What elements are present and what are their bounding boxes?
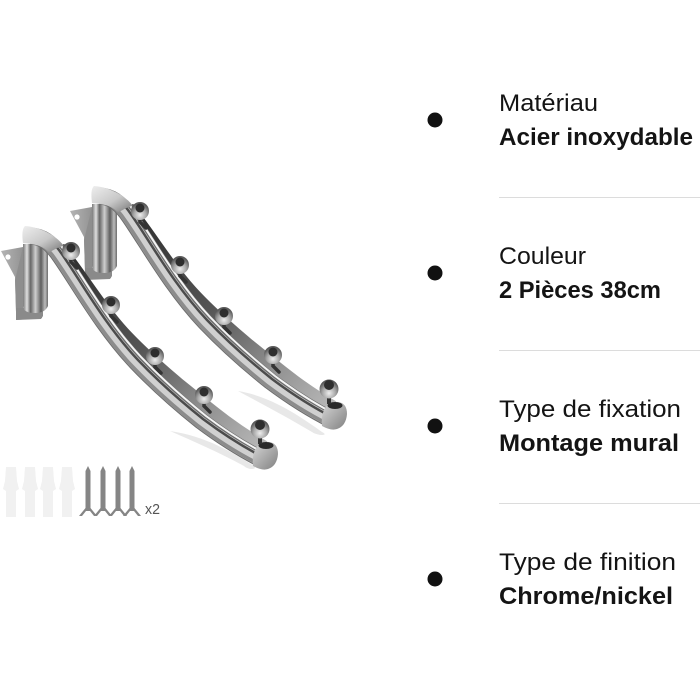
back bracket [70,186,347,430]
icon: wall plugs [3,467,75,517]
quantity label: x2 [145,501,160,518]
value: Chrome/nickel [499,583,673,610]
bullet [428,572,442,586]
icon: screws [79,466,141,516]
product image: wall mounted hanger brackets [1,186,347,518]
bullet [428,418,442,434]
floor shadows [170,391,325,469]
front bracket [1,226,278,470]
spec row: material [428,90,693,151]
value: Acier inoxydable [499,124,693,151]
label: Type de fixation [499,396,681,423]
spec row: mounting type [428,396,681,457]
label: Type de finition [499,549,676,576]
label: Matériau [499,90,598,117]
bullet [428,112,442,128]
spec row: finish type [428,549,676,610]
spec row: colour [428,243,661,304]
value: 2 Pièces 38cm [499,277,661,304]
value: Montage mural [499,430,679,457]
label: Couleur [499,243,586,270]
bullet [428,266,442,280]
